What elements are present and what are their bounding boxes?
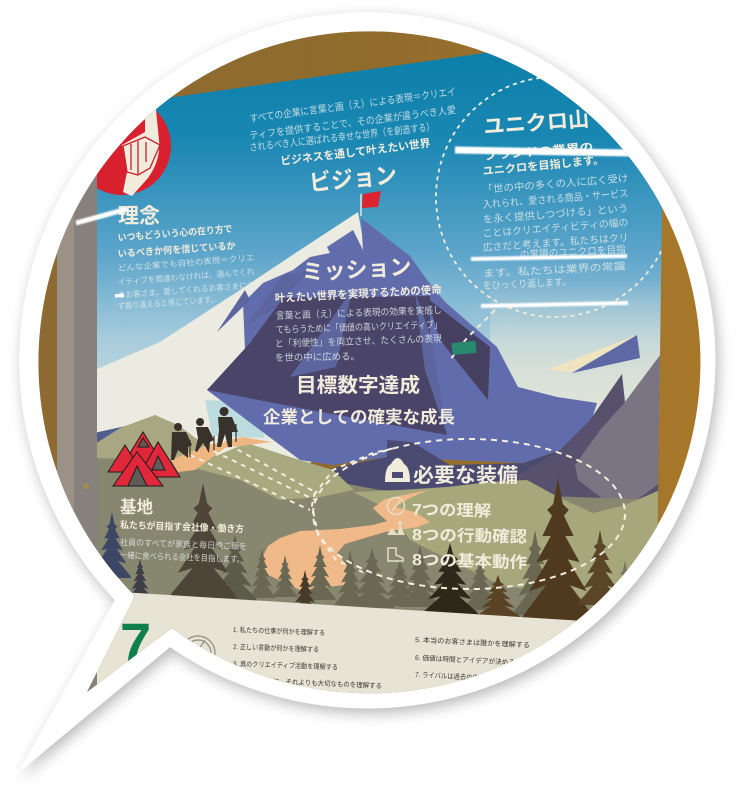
cream bottom panel xyxy=(97,592,576,694)
checklist text xyxy=(233,625,530,690)
icon: compass xyxy=(388,498,404,514)
left blue ridge xyxy=(97,426,126,442)
icon: red circle with fist xyxy=(73,97,171,196)
equipment title: 必要な装備 xyxy=(413,464,518,487)
dashed ellipse: equipment xyxy=(313,439,625,589)
base paragraph xyxy=(120,537,247,564)
pale shard xyxy=(205,400,265,438)
far peak xyxy=(547,335,640,373)
mission title: ミッション xyxy=(301,254,412,285)
wall strip xyxy=(57,213,74,512)
mid brown tree xyxy=(295,570,315,604)
base paragraph: 社員のすべてが家族と毎日晩ご飯を xyxy=(120,537,247,551)
Uniqlo mountain paragraph: をひっくり返します。 xyxy=(483,276,571,292)
base subheading: 私たちが目指す会社像・働き方 xyxy=(120,519,245,535)
big brown tree right xyxy=(522,478,589,623)
red tents xyxy=(108,432,180,486)
icon: people xyxy=(387,521,405,535)
right dark mountain xyxy=(513,356,660,499)
mission paragraph: てもらうために「価値の高いクリエイティブ」 xyxy=(276,319,442,336)
equipment line 7: 7つの理解 xyxy=(412,501,491,520)
icon: backpack xyxy=(385,458,410,482)
poster body xyxy=(97,52,662,694)
vision paragraph xyxy=(249,85,457,154)
Uniqlo mountain paragraph: の常識のユニクロを目指 xyxy=(519,242,626,261)
philosophy paragraph: るお客さま、愛してくれるお客さまに必 xyxy=(117,280,255,300)
philosophy title: 理念 xyxy=(118,205,160,228)
equipment line 8 basics: 8つの基本動作 xyxy=(412,551,527,572)
Uniqlo mountain paragraph: ことはクリエイティビティの幅の xyxy=(482,216,629,240)
peach upper path xyxy=(171,437,272,472)
Uniqlo mountain paragraph: 広さだと考えます。私たちはクリ xyxy=(482,232,629,254)
hikers xyxy=(171,407,238,460)
mission paragraph: 言葉と画（え）による表現の効果を実感し xyxy=(276,304,442,322)
mission subheading: 叶えたい世界を実現するための使命 xyxy=(274,282,442,305)
philosophy subheading xyxy=(117,223,236,260)
vision title: ビジョン xyxy=(308,162,398,196)
vision paragraph: すべての企業に言葉と画（え）による表現＝クリエイ xyxy=(249,85,457,125)
glare spot left xyxy=(115,295,124,296)
philosophy paragraph: どんな企業でも自社の表現＝クリエ xyxy=(117,252,255,273)
right dark spike xyxy=(427,298,490,400)
checklist text: 6. 価値は時間とアイデアが決める xyxy=(415,653,515,667)
snow slope xyxy=(97,212,363,463)
vision paragraph: されるべき人に選ばれる幸せな世界（を創造する） xyxy=(249,120,435,154)
mission paragraph: を世の中に広める。 xyxy=(275,351,360,364)
growth subtitle: 企業としての確実な成長 xyxy=(263,407,455,427)
philosophy paragraph xyxy=(117,252,255,311)
right green hill xyxy=(353,480,660,610)
Uniqlo mountain subheading: ユニクロを目指します。 xyxy=(482,152,605,178)
compass outline xyxy=(181,636,215,670)
glare bars xyxy=(455,150,632,306)
Uniqlo mountain paragraph xyxy=(482,172,629,292)
glass reflection right xyxy=(490,280,662,415)
checklist text: 3. 真のクリエイティブ活動を理解する xyxy=(233,659,338,672)
checklist text: 7. ライバルは過去の自分 xyxy=(415,670,485,682)
brown tree right xyxy=(578,530,614,605)
Uniqlo mountain hidden line: ブランドの業界の xyxy=(483,139,594,163)
lower band xyxy=(333,440,664,520)
mission paragraph xyxy=(275,304,442,364)
philosophy subheading: いつもどういう心の在り方で xyxy=(117,223,233,244)
olive foreground xyxy=(90,455,660,640)
glare bar left xyxy=(76,209,127,223)
Uniqlo mountain paragraph: 入れられ、愛される商品・サービス xyxy=(482,187,629,211)
Uniqlo mountain paragraph: ます。私たちは業界の常識 xyxy=(482,260,626,280)
equipment line 8 actions: 8つの行動確認 xyxy=(412,525,527,546)
philosophy subheading: いるべきか何を信じているか xyxy=(117,240,236,260)
photo of poster inside bubble xyxy=(38,31,700,694)
grey wall panel xyxy=(60,175,97,720)
dashed trail lines xyxy=(190,310,495,580)
base title: 基地 xyxy=(120,498,153,517)
background trees xyxy=(218,530,627,615)
upper blue facets xyxy=(217,270,447,435)
large tree left xyxy=(169,483,237,598)
checklist text: 5. 本当のお客さまは誰かを理解する xyxy=(415,635,530,650)
icon: boot xyxy=(388,548,403,561)
Uniqlo mountain paragraph: 「世の中の多くの人に広く受け xyxy=(482,172,629,196)
vision paragraph: ティフを提供することで、その企業が違うべき人愛 xyxy=(249,103,457,142)
philosophy paragraph: イティブを間違わなければ、選んでくれ xyxy=(117,266,255,287)
green hill behind hikers xyxy=(97,415,216,460)
big green seven: 7 xyxy=(120,611,151,674)
philosophy paragraph: ず振り返えると信じています。 xyxy=(117,294,218,311)
sky xyxy=(97,52,662,450)
wall bolt xyxy=(83,483,89,489)
dark tree centre xyxy=(421,543,479,615)
brown tree centre xyxy=(476,575,520,617)
Uniqlo mountain paragraph: を永く提供しつづける」という xyxy=(482,202,629,226)
dark blue tree left xyxy=(101,512,132,578)
checklist text: 1. 私たちの仕事が何かを理解する xyxy=(233,625,325,637)
checklist text: ともに、それよりも大切なものを理解する xyxy=(260,676,382,690)
vision subheading: ビジネスを通して叶えたい世界 xyxy=(280,136,431,168)
dark mass xyxy=(207,296,447,435)
exit sign xyxy=(452,341,476,355)
dashed circle: ユニクロ山 xyxy=(436,77,674,317)
main mountain xyxy=(207,218,597,465)
Uniqlo mountain title: ユニクロ山 xyxy=(483,108,590,139)
base paragraph: 一緒に食べられる会社を目指します。 xyxy=(120,550,244,564)
peach river xyxy=(260,490,430,590)
checklist text: 2. 正しい言動が何かを理解する xyxy=(233,642,319,654)
middle green hill xyxy=(190,443,354,500)
right mauve mountain xyxy=(575,356,660,500)
wood wall xyxy=(38,31,700,694)
mission paragraph: と「利便性」を両立させ、たくさんの表現 xyxy=(275,333,442,350)
flag xyxy=(361,191,381,216)
goal title: 目標数字達成 xyxy=(296,373,420,397)
small dark tree left xyxy=(132,558,148,598)
